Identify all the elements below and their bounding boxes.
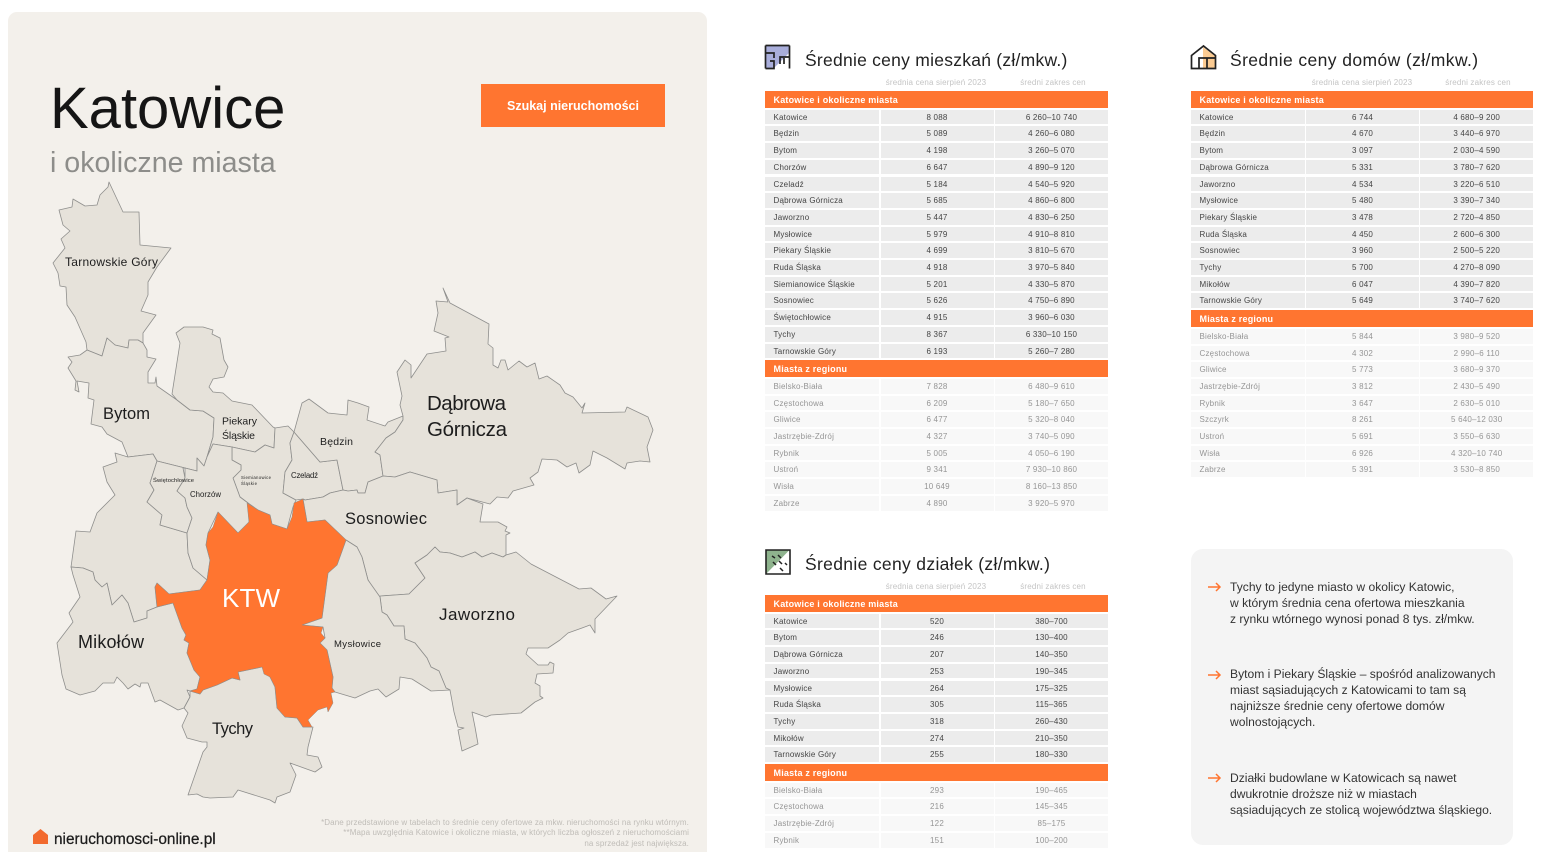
table: apartment prices: Zabrze xyxy=(774,499,800,508)
column header: land range: średni zakres cen xyxy=(1020,582,1086,591)
table: house prices: 4 270–8 090 xyxy=(1453,263,1500,272)
table: apartment prices: 5 979 xyxy=(926,230,948,239)
arrow 2 xyxy=(1208,670,1221,680)
column headers: apartments: średnia cena sierpień 2023 xyxy=(886,78,986,87)
table: house prices: Ruda Śląska xyxy=(1200,230,1247,239)
panel: map background xyxy=(8,12,707,852)
table: apartment prices: 3 920–5 970 xyxy=(1028,499,1075,508)
table: house prices: 3 960 xyxy=(1352,246,1373,255)
table: apartment prices: 3 810–5 670 xyxy=(1028,246,1075,255)
footnotes: **Mapa uwzględnia Katowice i okoliczne miasta, w których liczba ogłoszeń z nieruchomościami xyxy=(343,828,689,837)
table: land prices: 253 xyxy=(930,667,944,676)
table: land prices: Tarnowskie Góry xyxy=(774,750,836,759)
table: apartment prices: Dąbrowa Górnicza xyxy=(774,196,843,205)
table: apartment prices: Ruda Śląska xyxy=(774,263,821,272)
table: apartment prices: 6 477 xyxy=(926,415,948,424)
table: apartment prices: 4 198 xyxy=(926,146,948,155)
table: house prices: Mysłowice xyxy=(1200,196,1238,205)
arrow 1 xyxy=(1208,582,1221,592)
map labels: Piekary xyxy=(222,416,258,428)
table: land prices: Tychy xyxy=(774,717,795,726)
table: apartment prices: Jastrzębie-Zdrój xyxy=(774,432,834,441)
table: land prices: 190–465 xyxy=(1035,786,1068,795)
table: apartment prices: 4 540–5 920 xyxy=(1028,180,1075,188)
table: land prices: 140–350 xyxy=(1035,650,1068,659)
takeaway 2: Bytom i Piekary Śląskie – spośród analizowanych xyxy=(1230,667,1496,681)
table: house prices: 5 331 xyxy=(1352,163,1373,172)
table: house prices: Piekary Śląskie xyxy=(1200,213,1257,222)
table: apartment prices: Rybnik xyxy=(774,449,799,458)
map labels: Bytom xyxy=(103,405,150,423)
table: house prices: 2 990–6 110 xyxy=(1454,349,1500,358)
table: apartment prices: Jaworzno xyxy=(774,213,809,222)
heading: land prices: Średnie ceny działek (zł/mkw.) xyxy=(805,554,1050,574)
map labels: Śląskie xyxy=(222,429,255,442)
table: apartment prices: 4 750–6 890 xyxy=(1028,296,1075,305)
table: apartment prices: 4 860–6 800 xyxy=(1028,196,1075,205)
table: apartment prices: 4 910–8 810 xyxy=(1028,230,1075,239)
table: house prices: Sosnowiec xyxy=(1200,246,1240,255)
table: apartment prices: Katowice xyxy=(774,113,808,122)
table: house prices: Katowice xyxy=(1200,113,1234,122)
table: house prices: 3 390–7 340 xyxy=(1453,196,1500,205)
table: house prices: Zabrze xyxy=(1200,465,1226,474)
table: land prices xyxy=(765,595,1108,845)
table: apartment prices: 8 367 xyxy=(926,330,948,339)
table: land prices: Bielsko-Biała xyxy=(774,786,822,795)
map labels: Będzin xyxy=(320,436,353,448)
table: apartment prices: 5 447 xyxy=(926,213,948,222)
arrow 3 xyxy=(1208,774,1221,782)
map labels: Mysłowice xyxy=(334,639,381,650)
table: apartment prices: 4 050–6 190 xyxy=(1028,449,1075,458)
table: land prices: Katowice xyxy=(774,617,808,626)
table: land prices: 520 xyxy=(930,617,944,626)
table: house prices: Rybnik xyxy=(1200,399,1225,408)
table: apartment prices: 6 330–10 150 xyxy=(1026,330,1077,339)
map labels: KTW xyxy=(222,583,280,613)
table: land prices: Miasta z regionu xyxy=(774,768,847,778)
table: house prices: Gliwice xyxy=(1200,365,1227,374)
map labels: Mikołów xyxy=(78,632,145,652)
table: house prices: 4 680–9 200 xyxy=(1453,113,1500,122)
map labels: Sosnowiec xyxy=(345,510,427,528)
table: house prices: 5 649 xyxy=(1352,296,1373,305)
table: house prices: Szczyrk xyxy=(1200,415,1229,424)
table: apartment prices: Będzin xyxy=(774,129,799,138)
table: house prices: 5 391 xyxy=(1352,465,1373,474)
map labels: Świętochłowice xyxy=(153,476,194,484)
table: house prices: 4 320–10 740 xyxy=(1451,449,1502,458)
table: house prices: Tarnowskie Góry xyxy=(1200,296,1262,305)
table: apartment prices: Sosnowiec xyxy=(774,296,814,305)
table: apartment prices: Mysłowice xyxy=(774,230,812,239)
table: house prices: 3 097 xyxy=(1352,146,1373,155)
column header: house average: średnia cena sierpień 2023 xyxy=(1312,78,1412,87)
table: apartment prices: 9 341 xyxy=(926,465,948,474)
table: house prices: 3 530–8 850 xyxy=(1453,465,1500,474)
table: apartment prices: 4 330–5 870 xyxy=(1028,280,1075,289)
table: apartment prices: 3 970–5 840 xyxy=(1028,263,1075,272)
table: house prices: 6 926 xyxy=(1352,449,1373,458)
footnotes: *Dane przedstawione w tabelach to średnie ceny ofertowe za mkw. nieruchomości na rynku wtórnym. xyxy=(321,818,689,826)
takeaway 3: Działki budowlane w Katowicach są nawet xyxy=(1230,771,1457,785)
takeaway 1: z rynku wtórnego wynosi ponad 8 tys. zł/mkw. xyxy=(1230,612,1475,626)
table: land prices: 260–430 xyxy=(1035,717,1068,726)
table: land prices: 130–400 xyxy=(1035,633,1068,642)
table: land prices: 305 xyxy=(930,700,944,709)
table: house prices: 3 478 xyxy=(1352,213,1373,222)
table: apartment prices: 8 088 xyxy=(926,113,948,122)
table: house prices: 5 480 xyxy=(1352,196,1373,205)
table: apartment prices: Chorzów xyxy=(774,163,806,172)
table: apartment prices: 4 327 xyxy=(926,432,948,441)
table: apartment prices: 6 647 xyxy=(926,163,948,172)
table: house prices: 6 047 xyxy=(1352,280,1373,289)
table: land prices: 85–175 xyxy=(1038,819,1065,828)
map labels xyxy=(65,255,515,738)
table: apartment prices: Gliwice xyxy=(774,415,801,424)
table: house prices: 3 220–6 510 xyxy=(1453,180,1500,188)
table: house prices: 2 500–5 220 xyxy=(1453,246,1500,255)
table: land prices: 246 xyxy=(930,633,944,642)
table: apartment prices: Bielsko-Biała xyxy=(774,382,822,391)
table: land prices: 115–365 xyxy=(1036,700,1067,709)
map labels: Dąbrowa xyxy=(427,392,507,415)
table: land prices: 264 xyxy=(930,684,944,692)
table: land prices: 210–350 xyxy=(1035,734,1068,743)
table: house prices: 5 844 xyxy=(1352,332,1373,341)
table: apartment prices: 4 890–9 120 xyxy=(1028,163,1075,172)
table: house prices: 6 744 xyxy=(1352,113,1373,122)
region: Katowice highlighted xyxy=(155,499,346,727)
takeaway 3 xyxy=(1230,771,1492,817)
table: land prices: Jastrzębie-Zdrój xyxy=(774,819,834,828)
takeaway 3: dwukrotnie droższe niż w miastach xyxy=(1230,787,1417,801)
table: apartment prices: Bytom xyxy=(774,146,797,155)
table: land prices: 151 xyxy=(930,836,944,845)
table: apartment prices: 6 260–10 740 xyxy=(1026,113,1077,122)
table: apartment prices: 5 320–8 040 xyxy=(1028,415,1075,424)
table: land prices: 100–200 xyxy=(1035,836,1068,845)
table: land prices: Ruda Śląska xyxy=(774,700,821,709)
table: apartment prices: 7 930–10 860 xyxy=(1026,465,1077,474)
table: house prices: 3 812 xyxy=(1352,382,1373,391)
table: land prices: 145–345 xyxy=(1035,802,1068,811)
table: house prices: Jastrzębie-Zdrój xyxy=(1200,382,1260,391)
footnotes: na sprzedaż jest największa. xyxy=(584,839,689,848)
map labels: Chorzów xyxy=(190,490,221,499)
table: house prices: 4 302 xyxy=(1352,349,1373,358)
table: apartment prices: 7 828 xyxy=(926,382,948,391)
table: apartment prices: 5 201 xyxy=(926,280,948,289)
table: land prices: 207 xyxy=(930,650,944,659)
table: land prices: 274 xyxy=(930,734,944,743)
table: land prices: Dąbrowa Górnicza xyxy=(774,650,843,659)
table: apartment prices: 8 160–13 850 xyxy=(1026,482,1077,491)
map labels: Czeladź xyxy=(291,471,318,480)
table: house prices: Miasta z regionu xyxy=(1200,314,1273,324)
heading: apartment prices: Średnie ceny mieszkań (zł/mkw.) xyxy=(805,50,1068,70)
map labels: Jaworzno xyxy=(439,605,515,624)
table: house prices: 2 720–4 850 xyxy=(1453,213,1500,222)
table: house prices: 4 670 xyxy=(1352,129,1373,138)
map labels: Siemianowice xyxy=(241,475,272,480)
table: house prices: 8 261 xyxy=(1352,415,1373,424)
table: apartment prices: 10 649 xyxy=(924,482,950,491)
takeaway 1: Tychy to jedyne miasto w okolicy Katowic, xyxy=(1230,580,1454,594)
table: house prices: 4 450 xyxy=(1352,230,1373,239)
table: apartment prices: 5 180–7 650 xyxy=(1028,399,1075,408)
takeaway 2 xyxy=(1230,667,1496,729)
map labels: Tychy xyxy=(212,720,254,738)
table: land prices: 180–330 xyxy=(1035,750,1068,759)
table: land prices: 318 xyxy=(930,717,944,726)
table: apartment prices: 5 184 xyxy=(926,180,948,188)
table: apartment prices: Siemianowice Śląskie xyxy=(774,280,855,289)
table: house prices: 3 680–9 370 xyxy=(1453,365,1500,374)
table: house prices: 4 534 xyxy=(1352,180,1373,188)
table: apartment prices xyxy=(765,91,1108,508)
table: apartment prices: 4 260–6 080 xyxy=(1028,129,1075,138)
icon: land plot xyxy=(765,549,791,575)
table: apartment prices: Tarnowskie Góry xyxy=(774,347,836,356)
table: apartment prices: Katowice i okoliczne miasta xyxy=(774,95,898,105)
table: land prices: 293 xyxy=(930,786,944,795)
button: search properties xyxy=(481,84,665,127)
icon: apartment floor plan xyxy=(764,44,790,70)
table: house prices: 3 740–7 620 xyxy=(1453,296,1500,305)
table: house prices: Częstochowa xyxy=(1200,349,1250,358)
table: house prices: 3 550–6 630 xyxy=(1453,432,1500,441)
button: search properties: Szukaj nieruchomości xyxy=(507,99,639,113)
table: house prices: 4 390–7 820 xyxy=(1453,280,1500,289)
table: apartment prices: 3 740–5 090 xyxy=(1028,432,1075,441)
table: house prices: 3 440–6 970 xyxy=(1453,129,1500,138)
table: land prices: Mikołów xyxy=(774,734,804,743)
table: house prices: Jaworzno xyxy=(1200,180,1235,188)
table: apartment prices: 3 260–5 070 xyxy=(1028,146,1075,155)
table: house prices: 2 630–5 010 xyxy=(1453,399,1500,408)
map labels: Górnicza xyxy=(427,418,508,441)
table: house prices: 5 773 xyxy=(1352,365,1373,374)
table: house prices: Będzin xyxy=(1200,129,1225,138)
subtitle: i okoliczne miasta xyxy=(50,147,276,179)
table: house prices: Wisła xyxy=(1200,449,1220,458)
map labels: Śląskie xyxy=(241,481,258,486)
takeaway 2: najniższe średnie ceny ofertowe domów xyxy=(1230,699,1444,713)
table: house prices: 5 640–12 030 xyxy=(1451,415,1502,424)
takeaway 3: sąsiadujących ze stolicą województwa śląskiego. xyxy=(1230,803,1492,817)
table: land prices: Jaworzno xyxy=(774,667,809,676)
table: land prices: 190–345 xyxy=(1035,667,1068,676)
table: apartment prices: 5 089 xyxy=(926,129,948,138)
table: house prices: Dąbrowa Górnicza xyxy=(1200,163,1269,172)
table: land prices: Mysłowice xyxy=(774,684,812,692)
table: apartment prices: 4 830–6 250 xyxy=(1028,213,1075,222)
table: land prices: Katowice i okoliczne miasta xyxy=(774,599,898,609)
table: apartment prices: 3 960–6 030 xyxy=(1028,313,1075,322)
table: house prices: 2 600–6 300 xyxy=(1453,230,1500,239)
table: apartment prices: Piekary Śląskie xyxy=(774,246,831,255)
map of Katowice and surrounding cities xyxy=(52,182,654,804)
table: apartment prices: Miasta z regionu xyxy=(774,364,847,374)
table: house prices: 3 980–9 520 xyxy=(1453,332,1500,341)
heading: house prices: Średnie ceny domów (zł/mkw.) xyxy=(1230,50,1479,70)
table: apartment prices: Świętochłowice xyxy=(774,313,831,322)
title: Katowice: Katowice xyxy=(50,76,285,141)
table: land prices: Rybnik xyxy=(774,836,799,845)
table: apartment prices: 4 918 xyxy=(926,263,948,272)
table: apartment prices: 4 915 xyxy=(926,313,948,322)
table: house prices: Mikołów xyxy=(1200,280,1230,289)
table: house prices: Bytom xyxy=(1200,146,1223,155)
table: land prices: Częstochowa xyxy=(774,802,824,811)
table: apartment prices: Wisła xyxy=(774,482,794,491)
table: apartment prices: 6 480–9 610 xyxy=(1028,382,1075,391)
table: house prices: Bielsko-Biała xyxy=(1200,332,1248,341)
table: apartment prices: 6 209 xyxy=(926,399,948,408)
map labels: Tarnowskie Góry xyxy=(65,255,158,269)
takeaway 2: miast sąsiadujących z Katowicami to tam są xyxy=(1230,683,1466,697)
table: house prices: Ustroń xyxy=(1200,432,1224,441)
table: land prices: 175–325 xyxy=(1035,684,1068,692)
column header: house range: średni zakres cen xyxy=(1445,78,1511,87)
table: apartment prices: 6 193 xyxy=(926,347,948,356)
table: land prices: 380–700 xyxy=(1035,617,1068,626)
column header: land average: średnia cena sierpień 2023 xyxy=(886,582,986,591)
table: apartment prices: 5 005 xyxy=(926,449,948,458)
table: land prices: 216 xyxy=(930,802,944,811)
table: house prices: 2 430–5 490 xyxy=(1453,382,1500,391)
logo: nieruchomosci-online.pl: nieruchomosci-online.pl xyxy=(54,830,216,848)
table: house prices: 3 780–7 620 xyxy=(1453,163,1500,172)
panel: key takeaways xyxy=(1191,549,1513,845)
table: house prices: 3 647 xyxy=(1352,399,1373,408)
icon: house xyxy=(1190,44,1216,70)
column header: range: średni zakres cen xyxy=(1020,78,1086,87)
table: apartment prices: 5 260–7 280 xyxy=(1028,347,1075,356)
table: house prices: 5 691 xyxy=(1352,432,1373,441)
takeaway 1 xyxy=(1230,580,1475,626)
table: land prices: Bytom xyxy=(774,633,797,642)
table: house prices xyxy=(1191,91,1533,474)
table: apartment prices: Czeladź xyxy=(774,180,804,188)
table: apartment prices: Częstochowa xyxy=(774,399,824,408)
table: apartment prices: 5 626 xyxy=(926,296,948,305)
table: house prices: Tychy xyxy=(1200,263,1221,272)
table: apartment prices: 5 685 xyxy=(926,196,948,205)
table: land prices: 122 xyxy=(930,819,944,828)
table: apartment prices: Ustroń xyxy=(774,465,798,474)
table: apartment prices: Tychy xyxy=(774,330,795,339)
table: apartment prices: 4 699 xyxy=(926,246,948,255)
footnotes xyxy=(321,818,689,848)
table: house prices: 5 700 xyxy=(1352,263,1373,272)
table: house prices: 2 030–4 590 xyxy=(1453,146,1500,155)
table: land prices: 255 xyxy=(930,750,944,759)
takeaway 2: wolnostojących. xyxy=(1230,715,1315,729)
table: house prices: Katowice i okoliczne miasta xyxy=(1200,95,1324,105)
table: apartment prices: 4 890 xyxy=(926,499,948,508)
takeaway 1: w którym średnia cena ofertowa mieszkania xyxy=(1230,596,1465,610)
